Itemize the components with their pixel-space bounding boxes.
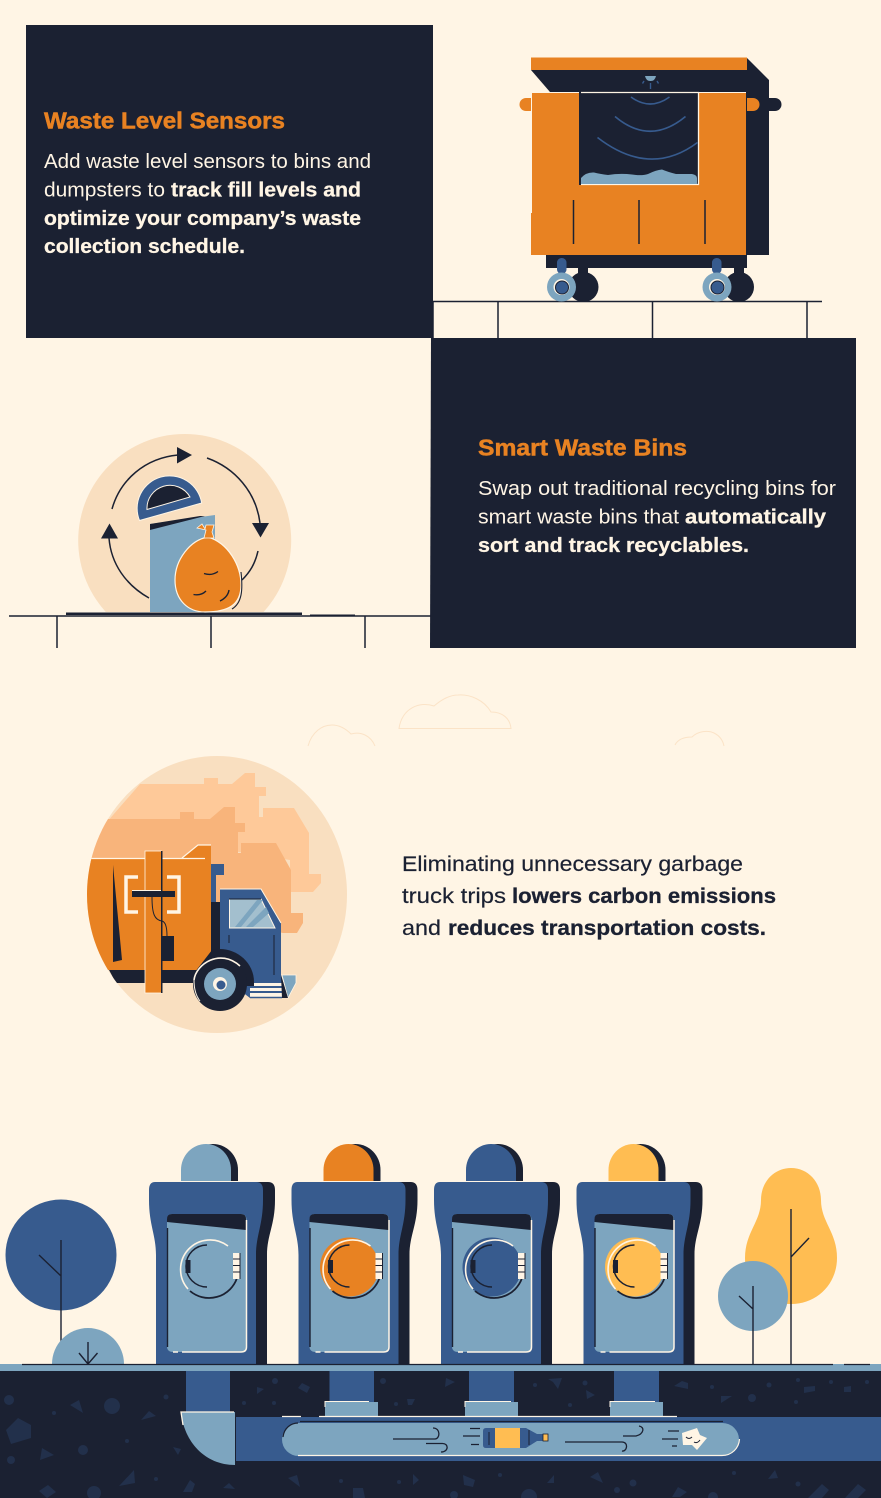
truck body — [80, 845, 215, 983]
underground soil — [0, 1371, 881, 1498]
text block: waste level sensors: dumpsters to — [44, 178, 165, 202]
bottle in tube — [483, 1428, 548, 1448]
ground: dumpster — [433, 301, 822, 338]
wind lines — [393, 1426, 679, 1452]
dumpster lid — [531, 58, 769, 255]
truck arm — [126, 851, 179, 993]
text block: waste level sensors: Add waste level sensors to bins and — [44, 150, 371, 173]
text block: smart waste bins: Swap out traditional recycling bins for — [478, 477, 836, 500]
decorative clouds — [308, 695, 724, 746]
text block: carbon emissions: truck trips — [402, 884, 506, 908]
text block: waste level sensors — [44, 150, 371, 258]
dumpster body — [531, 92, 760, 255]
exhaust smoke — [80, 773, 321, 933]
illustration: recycling bin and bag — [9, 434, 431, 648]
ground band — [0, 1364, 881, 1371]
truck wheel — [193, 949, 254, 1011]
ground: bin — [9, 612, 431, 648]
pipe elbow — [181, 1412, 236, 1465]
cab window — [230, 899, 275, 928]
truck exhaust pipe — [211, 864, 224, 952]
text block: carbon emissions: lowers carbon emissions — [512, 884, 776, 908]
dumpster base and wheels — [546, 255, 754, 302]
smart bin: yellow — [576, 1144, 702, 1364]
text block: smart waste bins: sort and track recyclables. — [478, 534, 749, 557]
waste fill level — [581, 170, 697, 184]
smart bin: orange — [292, 1144, 418, 1364]
dumpster handles — [520, 98, 782, 111]
peach ellipse — [87, 756, 347, 1033]
main horizontal pipe — [236, 1417, 881, 1461]
tree: right yellow — [745, 1168, 837, 1364]
recycling arrows — [101, 447, 269, 598]
text block: waste level sensors: track fill levels and — [171, 178, 361, 202]
vertical pipes — [186, 1371, 659, 1413]
text block: carbon emissions: and — [402, 916, 441, 940]
illustration: garbage truck — [80, 756, 347, 1033]
text block: waste level sensors: collection schedule. — [44, 235, 245, 258]
text block: smart waste bins: automatically — [685, 506, 827, 528]
pipe couplings — [325, 1402, 663, 1417]
bumper — [282, 975, 296, 998]
icon: sensor — [645, 76, 656, 81]
truck cab — [220, 889, 296, 998]
soil specks — [4, 1378, 869, 1498]
pneumatic pipe system — [181, 1371, 881, 1465]
illustration: dumpster with sensor — [433, 58, 822, 338]
crumpled paper in tube — [682, 1428, 707, 1450]
smart bin: light blue — [149, 1144, 275, 1364]
inner tube — [282, 1423, 740, 1456]
sensor waves — [598, 97, 698, 159]
panel: smart waste bins — [430, 338, 856, 648]
heading: smart waste bins: Smart Waste Bins — [478, 434, 687, 460]
smart bin: blue — [434, 1144, 560, 1364]
text block: carbon emissions: reduces transportation costs. — [448, 916, 766, 940]
grill — [250, 983, 282, 998]
text block: carbon emissions — [402, 852, 776, 940]
panel: waste level sensors — [26, 25, 433, 338]
text block: waste level sensors: optimize your company’s waste — [44, 207, 361, 230]
text block: smart waste bins: smart waste bins that — [478, 506, 679, 528]
bin lid — [137, 476, 202, 520]
trash bag — [175, 524, 242, 612]
text block: smart waste bins — [478, 477, 836, 557]
bin body — [150, 515, 215, 612]
text block: carbon emissions: Eliminating unnecessary garbage — [402, 852, 743, 876]
tree: right light blue — [718, 1261, 788, 1364]
bush: light blue — [52, 1328, 124, 1364]
peach circle — [78, 434, 292, 612]
tree: left blue — [6, 1200, 116, 1345]
heading: waste level sensors: Waste Level Sensors — [44, 108, 285, 134]
